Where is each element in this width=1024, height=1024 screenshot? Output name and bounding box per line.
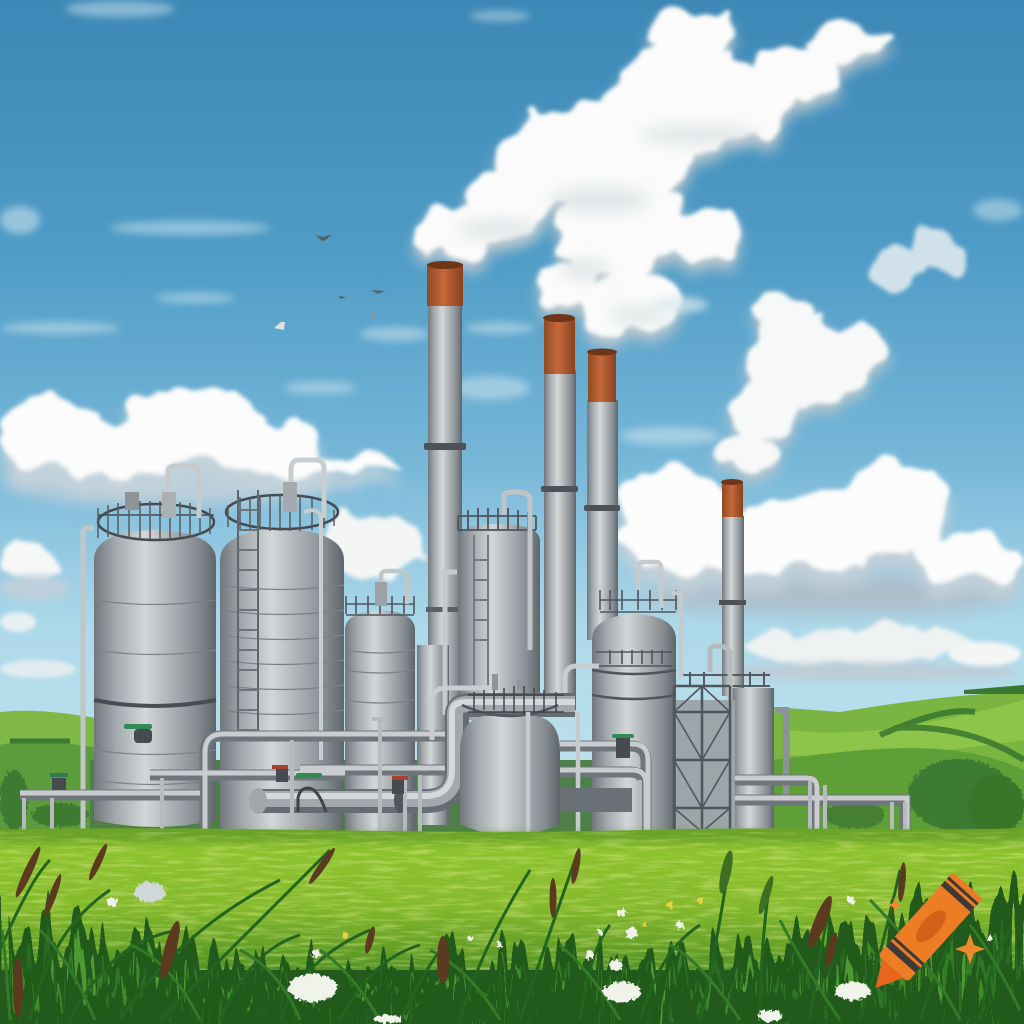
thin high clouds — [0, 1, 720, 445]
backdrop under lattice — [640, 700, 735, 835]
chimney 1 — [424, 261, 466, 700]
icon: crayon watermark — [861, 872, 985, 1001]
tank: tall with ladder — [220, 460, 344, 830]
smoke plume: small chimney — [717, 199, 1023, 483]
smoke plume: large chimneys — [419, 7, 895, 352]
cloud bank left — [0, 387, 425, 678]
tank: large left — [83, 466, 216, 830]
lattice tower — [674, 686, 730, 832]
pipe supports and valves — [24, 719, 905, 836]
tank: rear middle — [417, 492, 540, 825]
tank: right stacked — [592, 562, 681, 835]
tank: foreground center — [460, 674, 632, 836]
tank: small middle — [345, 571, 415, 835]
meadow grass — [0, 828, 1024, 1024]
chimney 4 — [719, 479, 746, 696]
birds — [274, 234, 385, 330]
distant hills — [0, 685, 1024, 840]
pipework — [20, 666, 907, 835]
foreground dark grass — [0, 850, 1024, 1024]
reeds and seed heads — [13, 842, 907, 1018]
chimney 3 — [584, 348, 620, 640]
wildflowers — [107, 882, 993, 1023]
large foreground pipe — [249, 702, 575, 814]
cloud bank right — [620, 457, 1024, 681]
chimneys — [424, 261, 746, 710]
tank: right rear — [682, 646, 786, 833]
chimney 2 — [541, 314, 578, 710]
